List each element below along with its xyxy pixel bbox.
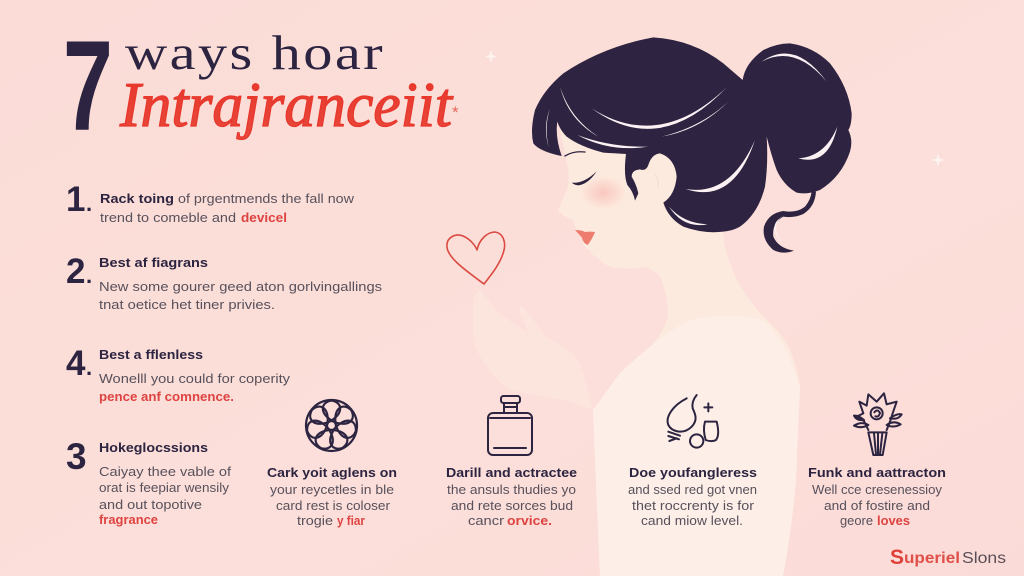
list item 4: Wonelll you could for coperity bbox=[99, 371, 291, 386]
list item 3: fragrance bbox=[99, 512, 158, 527]
title line 1: ways hoar bbox=[125, 25, 385, 80]
asterisk: * bbox=[452, 103, 459, 122]
body and face skin bbox=[558, 100, 800, 576]
list item 1: trend to comeble and bbox=[100, 210, 236, 225]
lips bbox=[575, 230, 595, 245]
column 3: drop: and ssed red got vnen bbox=[628, 482, 757, 497]
list item 4: . bbox=[86, 355, 92, 380]
hair mass bbox=[532, 37, 852, 232]
list item 4: Best a fflenless bbox=[99, 347, 203, 362]
list item 2: New some gourer geed aton gorlvingallings bbox=[99, 279, 383, 294]
column 3: drop bbox=[628, 395, 757, 528]
list item 4 bbox=[66, 344, 291, 404]
logo bbox=[890, 546, 1006, 569]
column 2: bottle: cancr bbox=[468, 513, 505, 528]
column 3: drop: Doe youfangleress bbox=[629, 465, 757, 480]
icon: perfume bottle bbox=[488, 396, 532, 455]
list item 4: pence anf comnence. bbox=[99, 389, 234, 404]
title line 2 script: Intrajranceiit bbox=[119, 69, 454, 140]
column 4: bouquet: geore bbox=[840, 513, 873, 528]
list item 2: Best af fiagrans bbox=[99, 255, 208, 270]
column 1: flower: trogie bbox=[297, 513, 333, 528]
list item 3: Hokeglocssions bbox=[99, 440, 208, 455]
icon: flower bbox=[305, 400, 358, 452]
list item 4: 4 bbox=[66, 344, 86, 383]
list item 1: Rack toing bbox=[100, 191, 174, 206]
eyebrow bbox=[565, 152, 585, 156]
list item 3 bbox=[66, 436, 231, 527]
list item 2: 2 bbox=[66, 252, 85, 291]
logo: uperiel bbox=[904, 550, 960, 567]
list item 2 bbox=[66, 252, 383, 312]
column 1: flower: card rest is coloser bbox=[276, 498, 391, 513]
woman illustration bbox=[473, 37, 852, 576]
cheek blush bbox=[580, 176, 627, 209]
column 1: flower bbox=[267, 400, 397, 528]
hair highlights bbox=[546, 53, 837, 242]
column 2: bottle: the ansuls thudies yo bbox=[447, 482, 576, 497]
icon: heart bbox=[447, 232, 505, 284]
column 4: bouquet: Well cce cresenessioy bbox=[812, 482, 942, 497]
column 2: bottle: orvice. bbox=[507, 513, 552, 528]
list item 1: of prgentmends the fall now bbox=[178, 191, 355, 206]
list item 1: 1 bbox=[66, 180, 85, 219]
list item 1: devicel bbox=[241, 210, 287, 225]
list item 3: and out topotive bbox=[99, 497, 202, 512]
column 2: bottle: Darill and actractee bbox=[446, 465, 577, 480]
column 2: bottle: and rete sorces bud bbox=[451, 498, 573, 513]
list item 3: orat is feepiar wensily bbox=[99, 480, 230, 495]
column 4: bouquet bbox=[808, 393, 946, 528]
list item 3: Caiyay thee vable of bbox=[99, 464, 231, 479]
title bbox=[63, 15, 459, 158]
column 1: flower: Cark yoit aglens on bbox=[267, 465, 397, 480]
column 1: flower: y fiar bbox=[337, 513, 365, 528]
column 3: drop: thet roccrenty is for bbox=[632, 498, 755, 513]
ear detail bbox=[655, 175, 658, 187]
sparkles bbox=[485, 50, 945, 167]
column 3: drop: cand miow level. bbox=[641, 513, 743, 528]
icon: bouquet bbox=[854, 393, 902, 455]
column 4: bouquet: loves bbox=[877, 513, 910, 528]
hand bbox=[473, 290, 593, 410]
hair, face details bbox=[532, 37, 852, 253]
list item 2: tnat oetice het tiner privies. bbox=[99, 297, 275, 312]
list item 2: . bbox=[86, 263, 92, 288]
column 2: bottle bbox=[446, 396, 577, 528]
hair curl bbox=[764, 192, 816, 253]
column 4: bouquet: and of fostire and bbox=[824, 498, 930, 513]
list item 1: . bbox=[86, 191, 92, 216]
list item 3: 3 bbox=[66, 436, 87, 477]
garment bbox=[593, 316, 800, 576]
list item 1 bbox=[66, 180, 355, 225]
logo: Slons bbox=[962, 550, 1006, 567]
column 1: flower: your reycetles in ble bbox=[270, 482, 394, 497]
logo: S bbox=[890, 546, 904, 569]
closed eye lashes bbox=[572, 171, 597, 185]
big number 7: 7 bbox=[63, 15, 113, 158]
column 4: bouquet: Funk and aattracton bbox=[808, 465, 946, 480]
icon: drop bulb and glass bbox=[668, 395, 718, 448]
